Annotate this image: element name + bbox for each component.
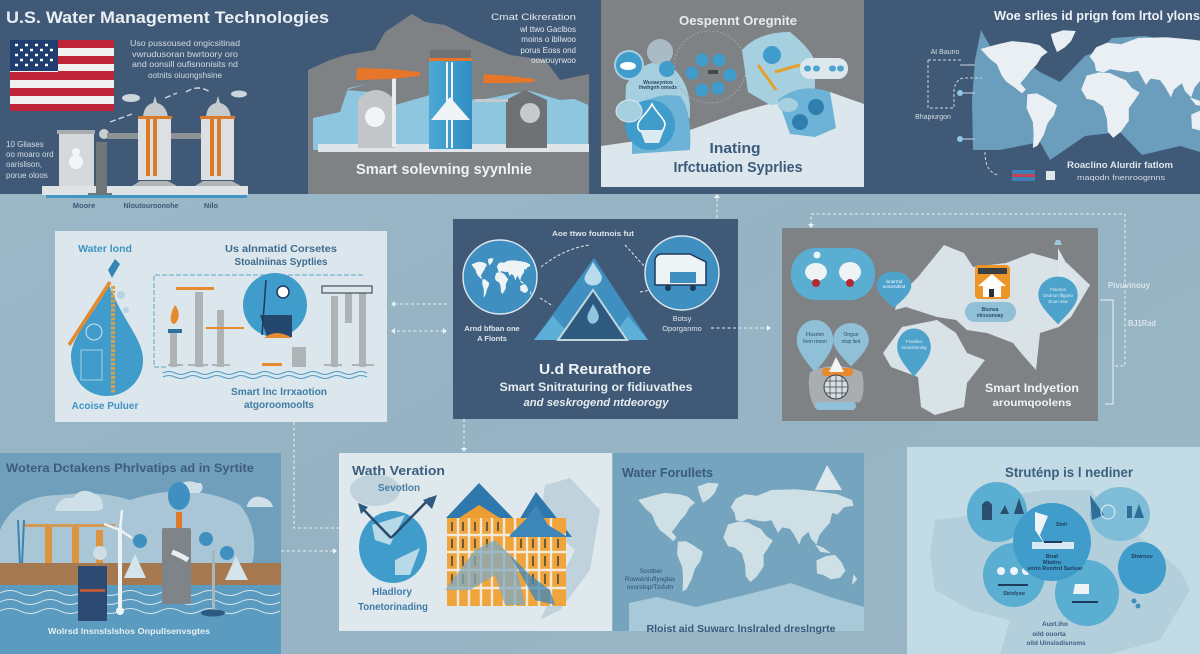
panel: central hub bbox=[453, 219, 738, 419]
globe caption bbox=[464, 324, 520, 343]
pin: north bbox=[877, 272, 911, 308]
waves bbox=[163, 372, 367, 378]
text block: intro: and oonsill oufisnonisits nd bbox=[132, 60, 238, 69]
subheading center: Stoalniinas Syptlies bbox=[234, 257, 328, 268]
hub title: U.d Reurathore bbox=[539, 361, 651, 378]
text block: side note: oo moaro ord bbox=[6, 150, 54, 159]
map note: Sootber bbox=[640, 568, 663, 575]
ocean shape bbox=[972, 30, 1200, 160]
light lower area bbox=[601, 92, 864, 187]
connectors bbox=[540, 245, 662, 306]
tower labels bbox=[73, 201, 218, 210]
panel: water land bbox=[55, 231, 387, 422]
navy device bbox=[78, 566, 107, 621]
heading: Wath Veration bbox=[352, 463, 445, 478]
text block: side note bbox=[6, 140, 54, 180]
icon: orange house bbox=[975, 265, 1010, 299]
arrow heads bbox=[333, 194, 814, 554]
ground line bbox=[318, 144, 589, 152]
pin: middle bbox=[833, 323, 869, 367]
text block: side note: porue oloos bbox=[6, 171, 48, 180]
right side notes: Pivuvinouy bbox=[1108, 281, 1151, 290]
hub subtitle line 2: and seskrogend ntdeorogy bbox=[524, 397, 669, 409]
text block: top right: moins o ibliwoo bbox=[521, 35, 577, 44]
pier bbox=[18, 520, 115, 565]
illustration: columns bbox=[168, 286, 374, 367]
icon: truck bbox=[645, 236, 719, 310]
panel backdrop bbox=[782, 228, 1098, 421]
panel: water data bbox=[0, 453, 281, 654]
icon: globe bbox=[463, 240, 537, 314]
panel backdrop bbox=[339, 453, 612, 631]
pin: east: Flsunos bbox=[1050, 287, 1067, 292]
faint map bbox=[350, 474, 600, 620]
cloud backdrop bbox=[0, 491, 254, 565]
caption: Rloist aid Suwarc lnslraled dreslngrte bbox=[646, 623, 836, 635]
truck caption bbox=[662, 314, 702, 333]
caption line 2: Tonetorinading bbox=[358, 602, 428, 613]
top banner bbox=[0, 0, 1200, 194]
pill: icons bbox=[791, 248, 875, 300]
panel backdrop bbox=[601, 0, 864, 187]
globe caption: Arnd bfban one bbox=[464, 324, 520, 333]
icon: grey blob with globe bbox=[809, 357, 864, 410]
sky water band bbox=[313, 84, 588, 150]
panel: smart induction regions bbox=[782, 228, 1098, 421]
clouds bbox=[55, 481, 273, 511]
text block: intro: ootnits oiuongshsine bbox=[148, 71, 223, 80]
mast bbox=[201, 550, 225, 616]
bubble: center large: Miatiru bbox=[1043, 560, 1061, 566]
pin: east bbox=[1038, 240, 1078, 324]
bubble: lower center bbox=[1055, 560, 1119, 626]
wind turbine bbox=[93, 510, 132, 615]
text block: intro: Uso pussoused ongicsitinad bbox=[130, 39, 240, 48]
panel text: Inating bbox=[710, 141, 760, 157]
caption: Hladlory bbox=[372, 587, 412, 598]
pill: label bbox=[965, 302, 1016, 322]
ground band bbox=[0, 563, 281, 585]
caption bbox=[1026, 621, 1086, 647]
left blob cluster: Wuoaeyntos bbox=[643, 80, 673, 86]
text block: intro bbox=[130, 39, 240, 80]
arrow connectors bbox=[281, 197, 1125, 551]
tower labels: Nloutouroonohe bbox=[124, 201, 178, 210]
map labels bbox=[915, 49, 960, 121]
right blob cluster bbox=[742, 32, 848, 137]
pin: middle: ntup lsnt bbox=[842, 339, 861, 345]
map labels: At Bauno bbox=[931, 49, 960, 56]
bubble: center large: snrin Rsnrtrd Sarluar bbox=[1027, 566, 1084, 572]
cloud backdrop bbox=[308, 14, 589, 194]
map land bbox=[883, 245, 1090, 415]
antarctic band bbox=[629, 583, 864, 631]
panel subtext: Irfctuation Syprlies bbox=[674, 160, 802, 176]
water bbox=[0, 585, 281, 654]
world map bbox=[638, 483, 857, 591]
text block: side note: 10 Gliases bbox=[6, 140, 44, 149]
pin: east: Snun ssw bbox=[1048, 299, 1069, 304]
subheading: Sevotlon bbox=[378, 483, 420, 494]
panel: world reach map bbox=[915, 8, 1200, 182]
heading: Struténp is l nediner bbox=[1005, 465, 1134, 480]
center icon ring bbox=[674, 31, 746, 103]
icon: water drop bbox=[69, 259, 143, 396]
map caption: Roaclino Alurdir fatlom bbox=[1067, 160, 1173, 170]
pin: left: Ftusrlon bbox=[806, 332, 824, 338]
panel: integrating infrastructure bbox=[601, 0, 864, 187]
text block: top right: wl ttwo Gaclbos bbox=[519, 25, 576, 34]
pin: Africa: Fsonlno bbox=[906, 339, 922, 344]
text block: top right: Cmat Cikreration bbox=[491, 12, 576, 23]
heading: Wotera Dctakens Phrlvatips ad in Syrtite bbox=[6, 463, 254, 475]
icon: globe with magnifier bbox=[243, 273, 307, 338]
pin: north: oonsrndmd bbox=[883, 284, 906, 289]
bubble: center large: Bnat bbox=[1046, 554, 1058, 560]
pin: north: lunarrnd bbox=[886, 279, 903, 284]
map labels: Bhapiurgon bbox=[915, 114, 951, 121]
right side notes bbox=[1108, 281, 1156, 328]
pin: left bbox=[797, 320, 833, 372]
caption: oild Uinslsdisnsms bbox=[1026, 640, 1086, 647]
white triangles bbox=[124, 554, 248, 580]
title: U.S. Water Management Technologies bbox=[6, 8, 329, 27]
icon: small flag bbox=[1012, 170, 1055, 181]
globe caption: A Flonts bbox=[477, 334, 507, 343]
map note bbox=[625, 568, 676, 591]
world map bbox=[981, 30, 1200, 148]
panel: U.S. water management bbox=[6, 8, 329, 210]
left blob cluster: lhwhgnh nmsdx bbox=[639, 85, 677, 91]
tower labels: Moore bbox=[73, 201, 95, 210]
label top: Aoe ttwo foutnois fut bbox=[552, 231, 635, 238]
bubble: center large: Stnlr bbox=[1056, 522, 1067, 528]
text block: side note: oarislison, bbox=[6, 160, 42, 169]
panel: water innovation bbox=[339, 453, 612, 631]
white triangle bbox=[815, 465, 842, 490]
dashed frame bbox=[154, 275, 363, 367]
pill: label: nlrsvunoay bbox=[977, 313, 1004, 319]
building illustration bbox=[445, 483, 572, 606]
icon: triangle pyramid bbox=[534, 258, 648, 340]
caption line 2: atgoroomoolts bbox=[244, 400, 314, 411]
cloud layer bbox=[345, 78, 586, 100]
text block: top right: porus Eoss ond bbox=[520, 46, 576, 55]
map subcaption: maqodn fnenroogmns bbox=[1077, 173, 1165, 182]
icon: American flag bbox=[10, 40, 114, 111]
pin: left: fonn mnon bbox=[803, 339, 827, 345]
caption: Wolrsd lnsnslslshos Onpullsenvsgtes bbox=[48, 626, 210, 636]
panel: water forums map bbox=[613, 453, 864, 635]
bubble: lower left bbox=[983, 543, 1045, 607]
panel backdrop bbox=[0, 453, 281, 654]
left tank bbox=[356, 68, 420, 148]
caption: Smart lnc lrrxaotion bbox=[231, 387, 327, 398]
bubble: far right bbox=[1118, 542, 1166, 608]
bubble: top left bbox=[967, 482, 1027, 542]
left blob cluster bbox=[615, 39, 690, 154]
panel label: Smart solevning syynlnie bbox=[356, 161, 532, 178]
caption: Acoise Puluer bbox=[72, 401, 138, 412]
icon: globe with arrows bbox=[358, 495, 437, 583]
heading center: Us alnmatid Corsetes bbox=[225, 244, 337, 255]
central blue tower bbox=[429, 50, 472, 149]
panel caption line 2: aroumqoolens bbox=[992, 397, 1072, 409]
tower labels: Nilo bbox=[204, 201, 218, 210]
grey tower with balloon bbox=[162, 482, 191, 604]
right side notes: BJ1Rad bbox=[1128, 319, 1156, 328]
illustration: water towers bbox=[42, 88, 248, 198]
bubble: top right bbox=[1090, 487, 1150, 541]
panel backdrop bbox=[613, 453, 864, 631]
faint map bbox=[930, 490, 1190, 654]
heading: Water lond bbox=[78, 243, 132, 255]
bubble: center large bbox=[1013, 503, 1091, 581]
right tank bbox=[475, 74, 547, 148]
map note: ovsrstnp/Ttsfutn bbox=[627, 584, 673, 591]
text block: intro: vwrudusoran bwrtoory oro bbox=[132, 50, 239, 59]
caption: oild ouorta bbox=[1032, 631, 1066, 638]
pill: label: Btunsa bbox=[982, 307, 999, 313]
hub subtitle: Smart Snitraturing or fidiuvathes bbox=[500, 380, 693, 394]
panel caption: Smart Indyetion bbox=[985, 383, 1079, 395]
bubble: far right: Stwroov bbox=[1131, 554, 1154, 560]
bubble: lower left: Strinlyoo bbox=[1003, 591, 1025, 597]
panel backdrop bbox=[453, 219, 738, 419]
pin: middle: Onguo bbox=[843, 332, 859, 338]
text block: top right bbox=[491, 12, 577, 65]
panel backdrop bbox=[907, 447, 1200, 654]
map note: Rowsknluflyoglas bbox=[625, 576, 676, 583]
heading: Woe srlies id prign fom lrtol ylons bbox=[994, 8, 1200, 23]
panel heading: Oespennt Oregnite bbox=[679, 14, 797, 28]
pin: Africa: nmsolnsnlsg bbox=[901, 345, 927, 350]
panel: strategy bubbles bbox=[907, 447, 1200, 654]
heading: Water Forullets bbox=[622, 465, 713, 480]
truck caption: Botsy bbox=[673, 314, 692, 323]
panel: smart solving system bbox=[308, 12, 589, 194]
text block: top right: oowouyrwoo bbox=[531, 56, 577, 65]
pin: Africa bbox=[897, 328, 931, 377]
panel backdrop bbox=[55, 231, 387, 422]
pin: east: Osonun lllguno bbox=[1043, 293, 1074, 298]
caption: Auxt.iho bbox=[1042, 621, 1068, 628]
icon: circles bbox=[133, 532, 234, 560]
truck caption: Oporganmo bbox=[662, 324, 702, 333]
map callout connectors bbox=[928, 60, 998, 175]
